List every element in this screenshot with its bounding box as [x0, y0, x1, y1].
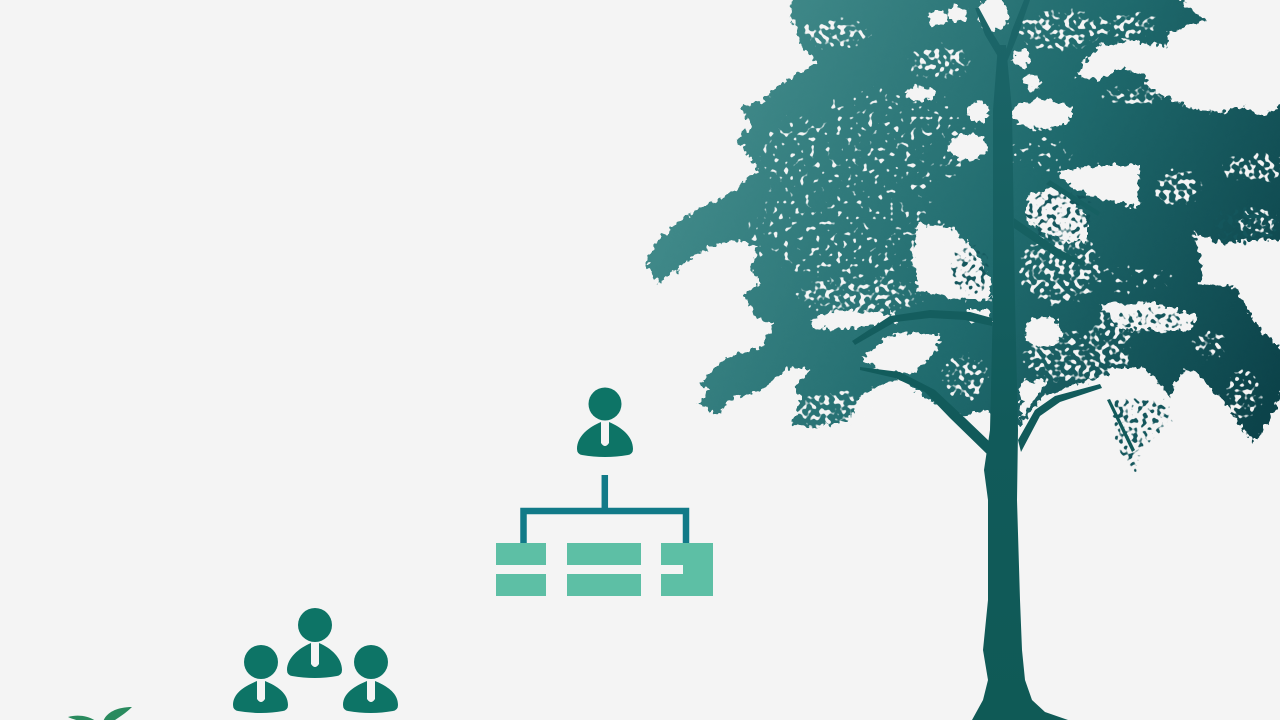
canopy gaps: [810, 0, 1196, 420]
head: [588, 388, 622, 420]
icon: plant sprout: [68, 707, 132, 720]
tree silhouette: [646, 0, 1280, 720]
right person: [343, 645, 398, 713]
top person: [287, 608, 342, 678]
tree canopy: [646, 0, 1280, 443]
icon: single manager person: [577, 388, 633, 457]
left person: [233, 645, 288, 713]
body with tie: [577, 422, 633, 457]
org chart boxes: [496, 543, 713, 596]
org chart connector: [524, 475, 686, 543]
tree trunk and branches: [852, 0, 1135, 720]
icon: team of three people: [233, 608, 398, 713]
hanging leaf clump: [946, 185, 1280, 478]
dense leaf speckle: [788, 4, 1280, 434]
sparse leaf speckle: [735, 75, 1185, 304]
